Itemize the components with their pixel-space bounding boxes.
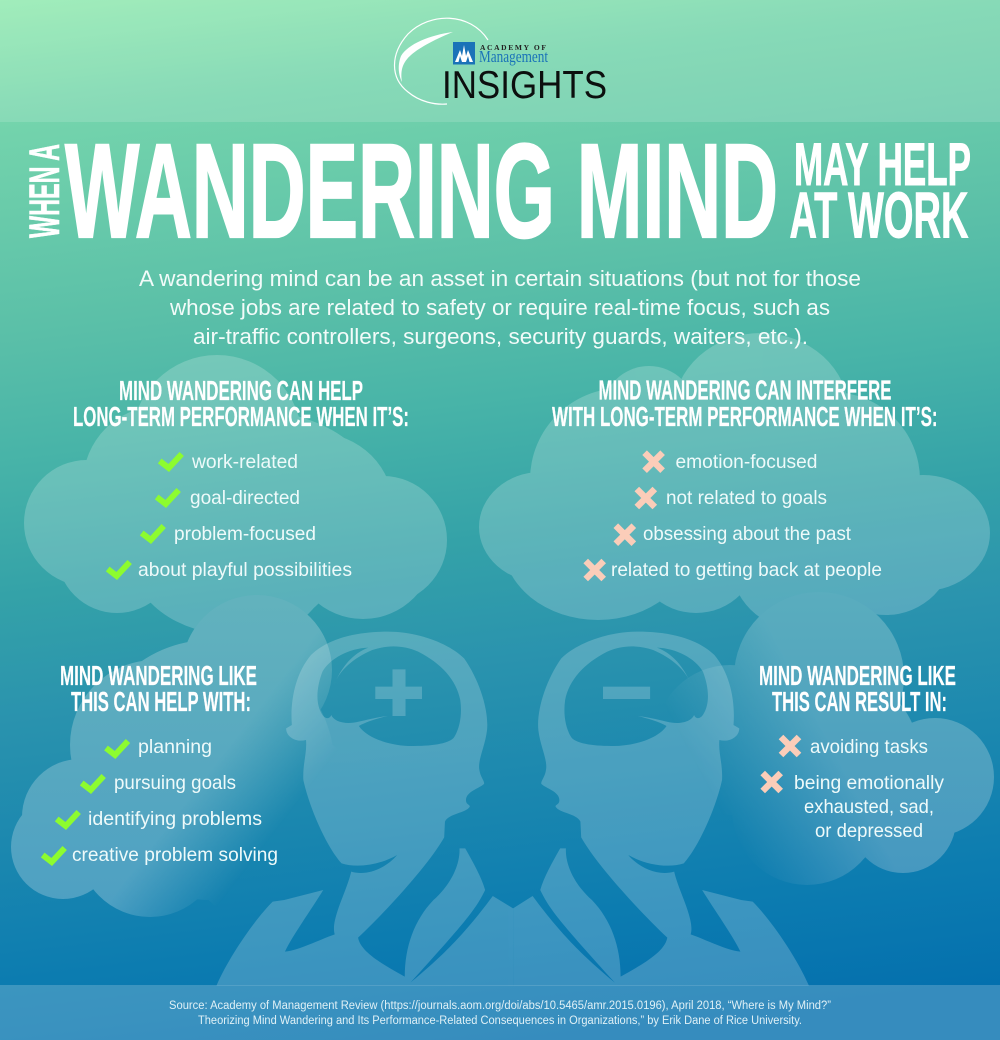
panel: can help with — [43, 660, 278, 866]
panel: can result in: or depressed — [815, 820, 923, 842]
intro text — [139, 266, 861, 349]
panel: can help with: pursuing goals — [114, 772, 236, 794]
source citation: Theorizing Mind Wandering and Its Performance-Related Consequences in Organizations,” by Erik Dane of Rice University. — [198, 1015, 802, 1027]
panel: can interfere with long-term performance — [552, 374, 938, 581]
footer band — [0, 985, 1000, 1040]
panel: can help long-term performance: LONG-TERM PERFORMANCE WHEN IT’S: — [73, 401, 409, 432]
panel: can help with: THIS CAN HELP WITH: — [71, 686, 251, 717]
logo: Academy of Management Insights: Management — [479, 47, 548, 66]
logo: Academy of Management Insights: INSIGHTS — [442, 64, 607, 107]
panel: can result in: exhausted, sad, — [804, 796, 934, 818]
panel: can interfere with long-term performance: not related to goals — [666, 487, 827, 509]
logo: Academy of Management Insights — [394, 18, 607, 107]
panel: can help long-term performance: work-related — [191, 451, 298, 473]
panel: can interfere with long-term performance: obsessing about the past — [643, 523, 852, 545]
panel: can help long-term performance: goal-directed — [190, 487, 300, 509]
logo: Academy of Management Insights: ACADEMY OF — [480, 43, 546, 52]
intro text: air-traffic controllers, surgeons, security guards, waiters, etc.). — [193, 324, 808, 349]
cloud: lower left — [11, 614, 332, 917]
header band — [0, 0, 1000, 122]
intro text: A wandering mind can be an asset in certain situations (but not for those — [139, 266, 861, 291]
source citation — [169, 1000, 831, 1027]
source citation: Source: Academy of Management Review (https://journals.aom.org/doi/abs/10.5465/amr.2015.0196), April 2018, “Where is My Mind?” — [169, 1000, 831, 1012]
panel: can help with: MIND WANDERING LIKE — [60, 660, 257, 691]
panel: can result in: being emotionally — [794, 772, 944, 794]
panel: can help long-term performance: problem-focused — [174, 523, 316, 545]
panel: can help with: identifying problems — [88, 808, 262, 830]
panel: can help with: creative problem solving — [72, 844, 278, 866]
panel: can help long-term performance: about playful possibilities — [138, 559, 352, 581]
head silhouettes — [216, 632, 809, 986]
panel: can result in — [759, 660, 956, 842]
cloud: lower right — [680, 606, 994, 885]
panel: can result in: avoiding tasks — [810, 736, 928, 758]
cloud: top left — [24, 355, 447, 635]
intro text: whose jobs are related to safety or require real-time focus, such as — [169, 295, 830, 320]
panel: can help long-term performance: MIND WANDERING CAN HELP — [119, 375, 363, 406]
panel: can help long-term performance — [73, 375, 409, 581]
panel: can help with: planning — [138, 736, 212, 758]
title: WHEN A — [22, 144, 69, 238]
cloud: top right — [479, 333, 990, 630]
panel: can interfere with long-term performance: emotion-focused — [676, 451, 818, 473]
panel: can interfere with long-term performance: related to getting back at people — [611, 559, 882, 581]
